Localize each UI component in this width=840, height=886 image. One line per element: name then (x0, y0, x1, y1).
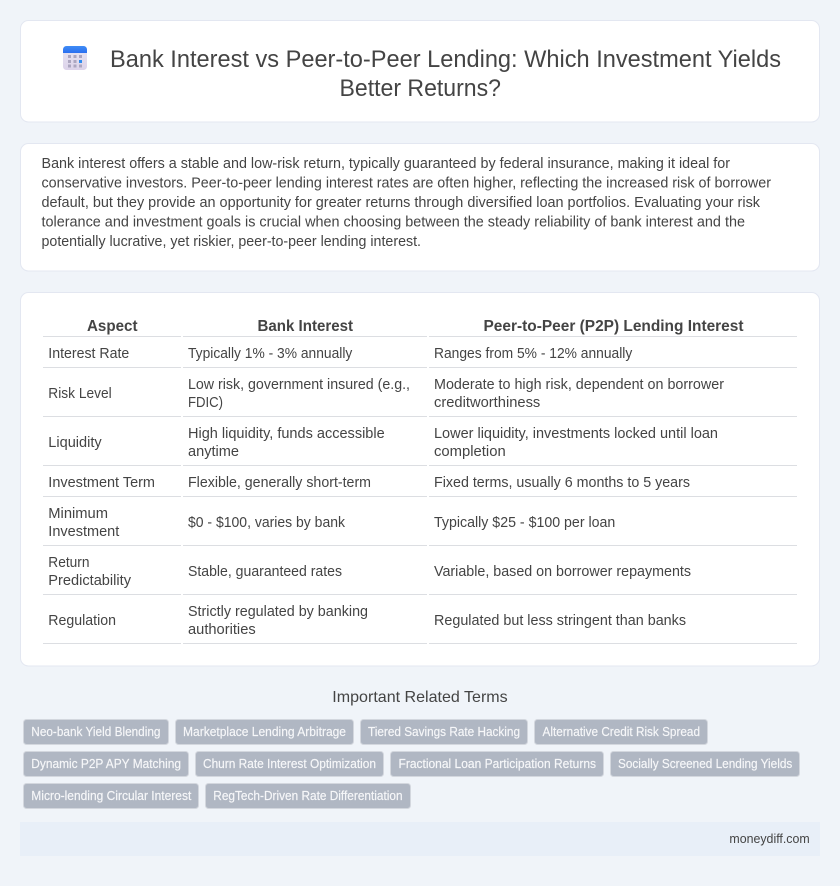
tag: socially screened lending yields: Socially Screened Lending Yields (618, 756, 793, 771)
tag: micro-lending circular interest (24, 784, 198, 808)
table header row: Aspect (87, 318, 138, 335)
table row: regulation: Regulation (48, 612, 116, 629)
tag: churn rate interest optimization (196, 752, 384, 776)
tag: marketplace lending arbitrage: Marketplace Lending Arbitrage (183, 724, 346, 739)
table row: risk level: creditworthiness (434, 394, 540, 411)
table row: liquidity: completion (434, 443, 506, 460)
text block: summary paragraph: potentially lucrative, yet riskier, peer-to-peer lending interest. (42, 233, 421, 250)
table row: return predictability: Variable, based on borrower repayments (434, 563, 691, 580)
table row: minimum investment: Typically $25 - $100 per loan (434, 514, 615, 531)
panel: summary (20, 144, 820, 271)
table row: interest rate: Typically 1% - 3% annually (188, 345, 353, 362)
tag: marketplace lending arbitrage (176, 720, 354, 744)
text block: summary paragraph (42, 155, 771, 250)
table row: risk level: FDIC) (188, 394, 223, 411)
table row: liquidity: Lower liquidity, investments locked until loan (434, 425, 718, 442)
tag list: related terms (24, 720, 800, 808)
tag: alternative credit risk spread: Alternative Credit Risk Spread (542, 724, 700, 739)
footer (20, 822, 820, 856)
table header row: Peer-to-Peer (P2P) Lending Interest (484, 318, 744, 335)
table row: investment term: Fixed terms, usually 6 months to 5 years (434, 474, 690, 491)
table row: interest rate: Interest Rate (48, 345, 129, 362)
heading: important related terms: Important Related Terms (332, 689, 508, 706)
table row: risk level: Low risk, government insured (e.g., (188, 376, 410, 393)
icon: calendar (63, 46, 87, 70)
tag: fractional loan participation returns: Fractional Loan Participation Returns (398, 756, 596, 771)
tag: churn rate interest optimization: Churn Rate Interest Optimization (203, 756, 376, 771)
tag: dynamic p2p apy matching (24, 752, 188, 776)
tag: neo-bank yield blending: Neo-bank Yield Blending (31, 724, 160, 739)
tag: regtech-driven rate differentiation (206, 784, 410, 808)
tag: tiered savings rate hacking (360, 720, 528, 744)
tag: micro-lending circular interest: Micro-lending Circular Interest (31, 788, 192, 803)
table row: liquidity: anytime (188, 443, 239, 460)
table row: minimum investment: Minimum (48, 505, 108, 522)
text block: summary paragraph: conservative investors. Peer-to-peer lending interest rates are often higher, reflecting the increased risk of borrower (42, 174, 771, 192)
table row: investment term: Flexible, generally short-term (188, 474, 371, 491)
tag: fractional loan participation returns (390, 752, 604, 776)
table header row: Bank Interest (258, 318, 354, 335)
table row: minimum investment (43, 505, 797, 546)
tag: neo-bank yield blending (24, 720, 168, 744)
table row: liquidity: Liquidity (48, 434, 102, 451)
text block: summary paragraph: tolerance and investment goals is crucial when choosing between the steady reliability of bank interest and the (42, 214, 745, 230)
table row: regulation (43, 603, 797, 644)
tag: socially screened lending yields (610, 752, 800, 776)
text block: summary paragraph: default, but they provide an opportunity for greater returns through diversified loan portfolios. Evaluating your risk (42, 194, 760, 211)
text block: summary paragraph: Bank interest offers a stable and low-risk return, typically guaranteed by federal insurance, making it ideal for (42, 155, 730, 172)
panel: comparison table (20, 292, 820, 666)
tag: regtech-driven rate differentiation: RegTech-Driven Rate Differentiation (213, 788, 403, 803)
table row: risk level (43, 376, 797, 417)
table row: regulation: Strictly regulated by banking (188, 603, 368, 620)
table row: investment term: Investment Term (48, 474, 155, 491)
table row: return predictability: Predictability (48, 572, 131, 589)
title (110, 46, 781, 102)
tag: alternative credit risk spread (534, 720, 708, 744)
table row: liquidity: High liquidity, funds accessible (188, 425, 385, 442)
tag: tiered savings rate hacking: Tiered Savings Rate Hacking (368, 724, 520, 739)
panel: title card (20, 20, 820, 122)
table row: investment term (43, 474, 797, 497)
table row: liquidity (43, 425, 797, 466)
table header row (43, 318, 797, 337)
table row: minimum investment: Investment (48, 523, 120, 540)
title: Bank Interest vs Peer-to-Peer Lending: Which Investment Yields (110, 46, 781, 73)
table row: risk level: Moderate to high risk, dependent on borrower (434, 376, 724, 393)
table row: return predictability: Stable, guaranteed rates (188, 563, 342, 580)
table row: risk level: Risk Level (48, 385, 112, 402)
table row: interest rate (43, 345, 797, 368)
title: Better Returns? (340, 75, 501, 102)
table row: regulation: Regulated but less stringent than banks (434, 612, 686, 629)
table row: regulation: authorities (188, 621, 256, 638)
table row: interest rate: Ranges from 5% - 12% annually (434, 345, 633, 362)
table row: minimum investment: $0 - $100, varies by bank (188, 514, 345, 531)
table row: return predictability: Return (48, 554, 90, 571)
tag: dynamic p2p apy matching: Dynamic P2P APY Matching (31, 756, 181, 771)
footer: moneydiff.com (729, 831, 810, 846)
table row: return predictability (43, 554, 797, 595)
